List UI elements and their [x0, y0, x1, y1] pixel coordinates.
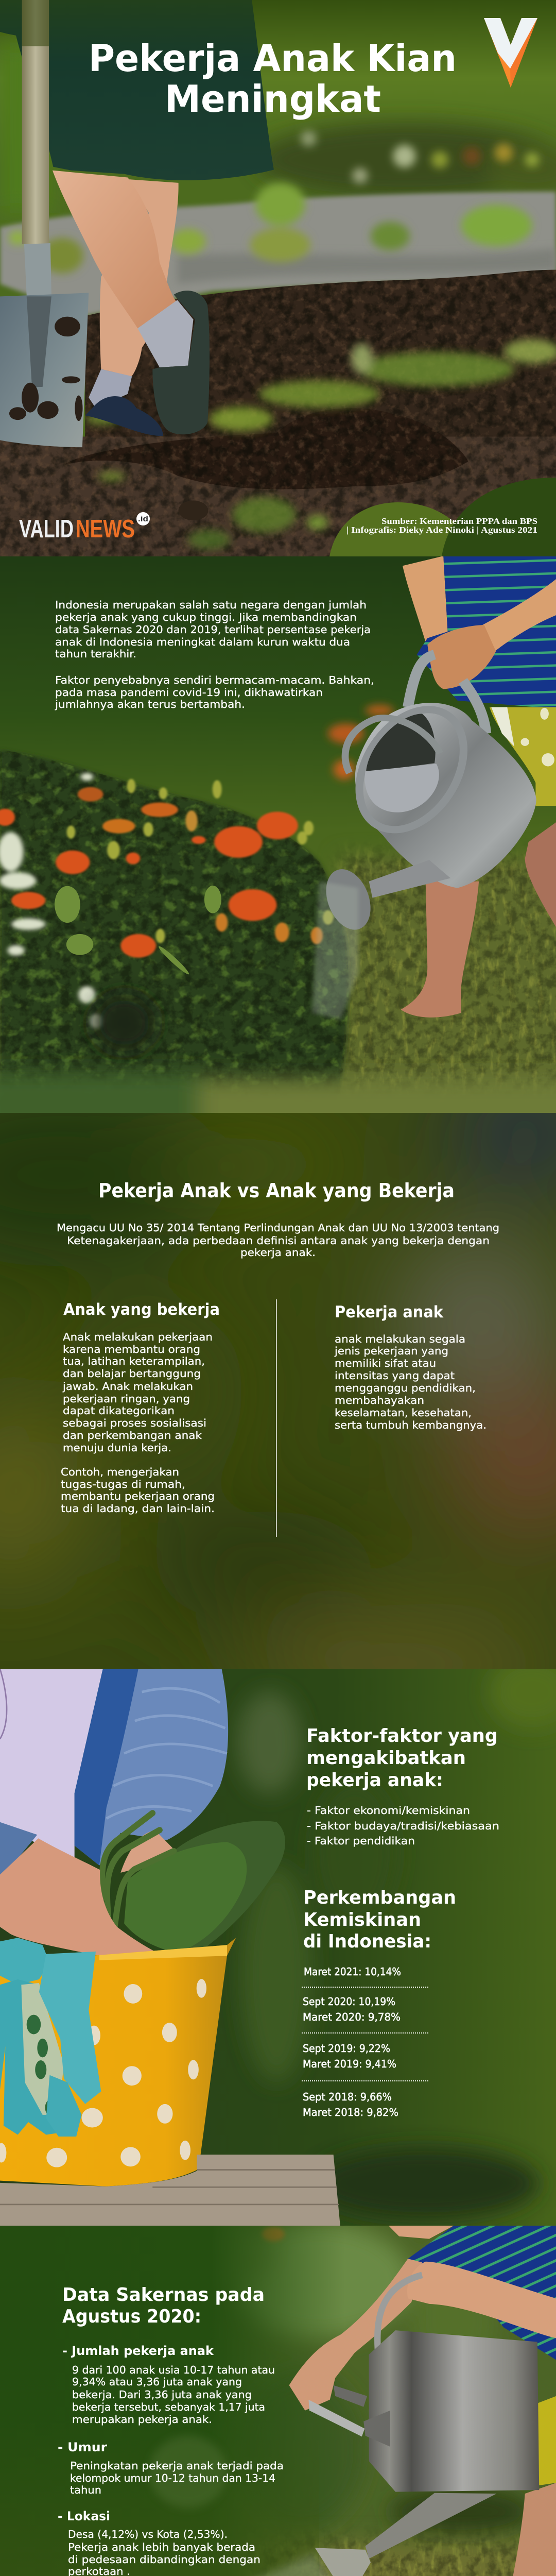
text: location: Pekerja anak lebih banyak berada — [68, 2541, 255, 2553]
column: pekerja anak: membahayakan — [335, 1394, 424, 1406]
text: factors list: - Faktor pendidikan — [307, 1835, 415, 1847]
text: poverty development statistics: di Indonesia: — [303, 1931, 431, 1952]
text: child worker count: bekerja tersebut, sebanyak 1,17 juta — [72, 2401, 265, 2413]
text: child worker count: merupakan pekerja anak. — [72, 2413, 212, 2426]
column: anak yang bekerja: jawab. Anak melakukan — [62, 1380, 193, 1393]
panel: definitions comparison — [0, 1113, 556, 1669]
panel: Sakernas data — [0, 2226, 556, 2576]
column: pekerja anak: mengganggu pendidikan, — [335, 1382, 476, 1394]
column: pekerja anak: jenis pekerjaan yang — [334, 1345, 448, 1357]
text: poverty development statistics: Maret 2019: 9,41% — [303, 2058, 396, 2070]
blurred background — [0, 1072, 556, 1710]
text: introduction paragraphs: Faktor penyebabnya sendiri bermacam-macam. Bahkan, — [55, 674, 374, 686]
photo: hand with yellow bucket — [0, 1656, 556, 2229]
text: poverty development statistics — [302, 1887, 456, 2119]
column: anak yang bekerja: tugas-tugas di rumah, — [61, 1478, 185, 1490]
title — [89, 37, 457, 121]
text: factors list: - Faktor ekonomi/kemiskinan — [307, 1804, 470, 1817]
column: anak yang bekerja: pekerjaan ringan, yang — [63, 1393, 190, 1405]
source badge — [329, 478, 556, 556]
text: location — [58, 2509, 260, 2576]
logo: VALIDNEWS.id: .id — [138, 515, 148, 523]
panel: introduction — [0, 556, 556, 1113]
text: introduction paragraphs: pekerja anak yang cukup tinggi. Jika membandingkan — [55, 611, 357, 623]
logo: VALIDNEWS.id — [19, 512, 150, 543]
column: pekerja anak: intensitas yang dapat — [335, 1369, 455, 1382]
text: poverty development statistics: Maret 2018: 9,82% — [303, 2106, 398, 2119]
text: legal basis — [57, 1222, 499, 1259]
column: pekerja anak: anak melakukan segala — [335, 1333, 465, 1345]
text: poverty development statistics: Sept 2019: 9,22% — [303, 2042, 390, 2055]
text: age: kelompok umur 10-12 tahun dan 13-14 — [70, 2472, 275, 2484]
column: anak yang bekerja: dapat dikategorikan — [63, 1404, 175, 1417]
text: age: tahun — [70, 2484, 101, 2496]
text: poverty development statistics: Kemiskinan — [303, 1909, 421, 1930]
photo: farmer legs and shovel in a field — [0, 0, 556, 556]
heading: Data Sakernas pada — [62, 2284, 265, 2306]
title: Meningkat — [165, 77, 381, 121]
text: poverty development statistics: Sept 2018: 9,66% — [303, 2091, 392, 2103]
title: Pekerja Anak Kian — [89, 37, 457, 80]
column: anak yang bekerja: dan perkembangan anak — [63, 1429, 202, 1442]
text: age: - Umur — [58, 2440, 107, 2454]
text: factors list: pekerja anak: — [306, 1770, 443, 1791]
photo: child with watering can — [0, 2223, 556, 2576]
text: location: - Lokasi — [58, 2509, 110, 2523]
column: anak yang bekerja: dan belajar bertanggung — [63, 1367, 201, 1380]
column: pekerja anak: serta tumbuh kembangnya. — [335, 1419, 486, 1431]
column: anak yang bekerja: Contoh, mengerjakan — [61, 1466, 179, 1478]
heading: Agustus 2020: — [62, 2306, 201, 2327]
text: poverty development statistics: Sept 2020: 10,19% — [303, 1995, 395, 2008]
panel: factors and poverty — [0, 1669, 556, 2226]
heading — [62, 2284, 265, 2327]
panel: hero photo with title — [0, 0, 556, 556]
text: child worker count — [62, 2344, 275, 2426]
text: child worker count: bekerja. Dari 3,36 juta anak yang — [72, 2388, 252, 2401]
text: factors list: mengakibatkan — [306, 1748, 466, 1769]
text: legal basis: pekerja anak. — [240, 1246, 316, 1259]
text: legal basis: Ketenagakerjaan, ada perbedaan definisi antara anak yang bekerja dengan — [67, 1234, 490, 1247]
text: factors list — [306, 1725, 499, 1847]
column: anak yang bekerja: tua di ladang, dan lain-lain. — [61, 1502, 215, 1515]
column: anak yang bekerja: menuju dunia kerja. — [63, 1442, 171, 1454]
text: introduction paragraphs: anak di Indonesia meningkat dalam kurun waktu dua — [55, 636, 350, 648]
text: factors list: Faktor-faktor yang — [306, 1725, 498, 1747]
column: pekerja anak — [334, 1303, 486, 1431]
text: poverty development statistics: Maret 2021: 10,14% — [304, 1965, 401, 1978]
text: introduction paragraphs: Indonesia merupakan salah satu negara dengan jumlah — [55, 599, 367, 611]
column: pekerja anak: Pekerja anak — [335, 1303, 444, 1321]
text: introduction paragraphs — [55, 599, 374, 710]
text: factors list: - Faktor budaya/tradisi/kebiasaan — [307, 1820, 499, 1832]
text: introduction paragraphs: jumlahnya akan terus bertambah. — [55, 698, 245, 710]
column: anak yang bekerja: tua, latihan keterampilan, — [63, 1355, 205, 1367]
text: introduction paragraphs: tahun terakhir. — [55, 648, 136, 660]
column: pekerja anak: keselamatan, kesehatan, — [335, 1406, 472, 1419]
icon: V logo — [484, 18, 537, 88]
text: age — [58, 2440, 284, 2496]
text: poverty development statistics: Maret 2020: 9,78% — [303, 2011, 401, 2023]
column: anak yang bekerja: sebagai proses sosialisasi — [63, 1417, 206, 1429]
text: introduction paragraphs: pada masa pandemi covid-19 ini, dikhawatirkan — [55, 686, 323, 699]
source badge: | Infografis: Dieky Ade Ninoki | Agustus 2021 — [346, 525, 537, 535]
text: location: Desa (4,12%) vs Kota (2,53%). — [68, 2528, 228, 2540]
column: anak yang bekerja: Anak yang bekerja — [63, 1300, 220, 1319]
column: pekerja anak: memiliki sifat atau — [335, 1357, 436, 1369]
logo: VALIDNEWS.id: VALID — [19, 515, 74, 543]
text: age: Peningkatan pekerja anak terjadi pada — [70, 2460, 284, 2472]
text: poverty development statistics: Perkembangan — [303, 1887, 456, 1908]
text: child worker count: - Jumlah pekerja anak — [62, 2344, 214, 2358]
logo: VALIDNEWS.id: NEWS — [76, 515, 135, 543]
text: legal basis: Mengacu UU No 35/ 2014 Tentang Perlindungan Anak dan UU No 13/2003 tentang — [57, 1222, 499, 1234]
photo: child watering flowers — [0, 546, 556, 1144]
text: introduction paragraphs: data Sakernas 2020 dan 2019, terlihat persentase pekerja — [55, 623, 371, 636]
column: anak yang bekerja — [61, 1300, 220, 1515]
column: anak yang bekerja: membantu pekerjaan orang — [61, 1490, 215, 1502]
text: child worker count: 9 dari 100 anak usia 10-17 tahun atau — [72, 2364, 275, 2376]
text: child worker count: 9,34% atau 3,36 juta anak yang — [72, 2376, 242, 2388]
column: anak yang bekerja: karena membantu orang — [63, 1343, 200, 1355]
source badge: Sumber: Kementerian PPPA dan BPS — [381, 516, 537, 526]
column: anak yang bekerja: Anak melakukan pekerjaan — [63, 1331, 213, 1343]
heading: Pekerja Anak vs Anak yang Bekerja — [98, 1179, 455, 1202]
text: location: di pedesaan dibandingkan dengan — [68, 2553, 260, 2566]
